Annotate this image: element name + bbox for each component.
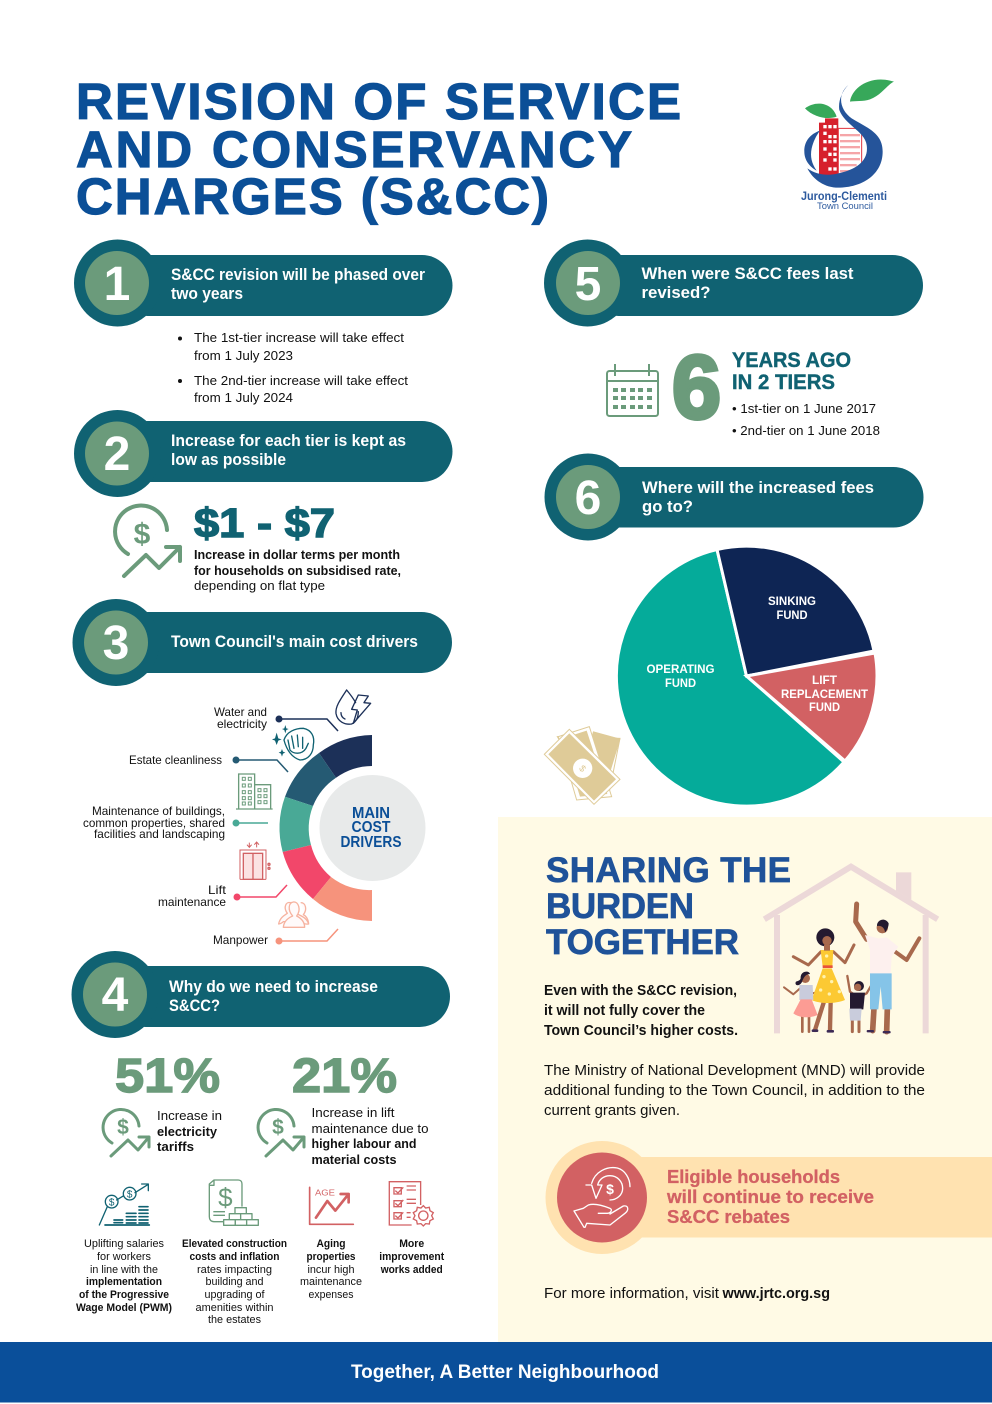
text: MND additional funding: The Ministry of National Development (MND) will provide [544,1063,925,1079]
text: even with the revision: Even with the S&CC revision, [544,983,737,999]
label: maintenance of buildings [83,804,268,841]
stat: big 6: 6 [672,338,721,438]
label: water and electricity [214,705,338,731]
text: even with the revision: it will not fully cover the [544,1003,705,1019]
text: electricity tariffs: tariffs [157,1139,194,1154]
text: construction costs [182,1238,287,1326]
section 2 description: for households on subsidised rate, [194,563,401,578]
text: electricity tariffs: electricity [157,1124,218,1139]
logo: Jurong-Clementi Town Council: Town Council [817,201,873,211]
title: CHARGES (S&CC) [76,168,549,225]
section 6 header [544,454,924,540]
text: electricity tariffs [157,1108,222,1154]
chart: fund allocation pie: OPERATING [646,662,714,676]
logo: Jurong-Clementi Town Council: Jurong-Clementi [801,191,887,203]
section 4 header [72,951,450,1038]
text: lift maintenance increase: Increase in lift [312,1105,395,1120]
text: lift maintenance increase: material costs [312,1152,396,1167]
icon: construction costs [209,1180,258,1225]
section 3 header: Town Council's main cost drivers [171,633,418,651]
section 6 header: 6 [575,472,601,525]
text: uplifting salaries [76,1238,172,1314]
section 1 header: two years [171,285,243,303]
text: uplifting salaries: Uplifting salaries [84,1238,164,1250]
section 2 description [194,547,401,593]
icon: rebate hand with dollar [574,1168,630,1227]
text: years ago in 2 tiers: • 2nd-tier on 1 June 2018 [732,423,880,438]
section 4 header: S&CC? [169,997,220,1015]
icon: calendar [607,364,658,416]
label: maintenance of buildings: Maintenance of buildings, [92,804,225,818]
text: more improvement works: works added [380,1264,443,1276]
chart: fund allocation pie: REPLACEMENT [781,687,869,701]
section 4 header: 4 [102,969,129,1022]
label: estate cleanliness [129,753,288,772]
icon: improvement checklist [389,1182,433,1226]
chart: fund allocation pie: FUND [809,700,840,714]
chart: fund allocation pie: LIFT [812,673,838,687]
label: maintenance of buildings: facilities and landscaping [94,827,225,841]
icon: lift maintenance cost rising: $ [272,1116,284,1139]
chart: fund allocation pie: SINKING [768,594,816,608]
section 2 header: low as possible [171,451,286,469]
section 3 header [72,599,452,686]
stat: 21%: 21% [292,1050,397,1103]
text: aging properties [300,1238,362,1301]
text: construction costs: building and [206,1276,264,1288]
section 5 header: When were S&CC fees last [642,265,854,283]
text: aging properties: expenses [308,1289,354,1301]
section 1 header: 1 [104,258,130,311]
label: water and electricity: electricity [217,717,267,731]
heading: sharing the burden together: TOGETHER [546,923,739,962]
chart: fund allocation pie: FUND [776,608,808,622]
heading: sharing the burden together: SHARING THE [546,851,791,890]
icon: cleaning hand [272,725,314,760]
text: more information: www.jrtc.org.sg [722,1286,830,1302]
text: uplifting salaries: of the Progressive [79,1289,169,1301]
callout: eligible households rebates: Eligible households [667,1167,840,1187]
text: more improvement works: More [399,1238,424,1250]
section 1 header [74,240,452,326]
icon: construction costs: $ [218,1183,233,1213]
section 2 header [74,410,452,497]
chart: main cost drivers half donut: COST [352,819,391,836]
section 5 header: revised? [642,284,710,302]
label: lift maintenance: Lift [208,883,227,897]
icon: electricity cost rising: $ [117,1116,129,1139]
section 5 header [544,240,923,326]
text: even with the revision [544,983,738,1039]
heading: sharing the burden together [546,851,791,962]
icon: electricity cost rising [103,1109,149,1156]
icon: rebate hand with dollar: $ [606,1181,614,1197]
text: more improvement works: improvement [379,1251,445,1263]
text: MND additional funding: additional funding to the Town Council, in addition to the [544,1083,925,1099]
title [76,73,681,225]
chart: fund allocation pie: FUND [665,676,696,690]
text: uplifting salaries: implementation [86,1276,162,1288]
section 1 bullet list [178,330,408,405]
text: even with the revision: Town Council’s higher costs. [544,1023,738,1039]
text: aging properties: incur high [308,1264,354,1276]
chart: main cost drivers half donut: MAIN [352,805,390,822]
section 2 description: depending on flat type [194,578,325,593]
text: construction costs: rates impacting [197,1264,272,1276]
label: manpower [213,929,338,947]
text: lift maintenance increase [312,1105,428,1167]
text: uplifting salaries: Wage Model (PWM) [76,1302,172,1314]
chart: main cost drivers half donut: DRIVERS [340,834,402,851]
section 1 bullet list: from 1 July 2023 [194,348,293,363]
chart: main cost drivers half donut [280,735,426,921]
section 1 header: S&CC revision will be phased over [171,266,426,284]
icon: salaries growth: $ [127,1189,133,1200]
title: REVISION OF SERVICE [76,73,681,130]
icon: people [279,902,309,927]
icon: dollar with rising arrow [115,506,180,576]
label: manpower: Manpower [213,933,268,947]
icon: salaries growth [99,1184,149,1225]
section 2 description: Increase in dollar terms per month [194,547,400,562]
icon: lift [240,842,270,879]
text: construction costs: the estates [208,1314,261,1326]
callout: eligible households rebates: S&CC rebates [667,1207,790,1227]
section 1 bullet list: from 1 July 2024 [194,390,293,405]
section 2 header: Increase for each tier is kept as [171,432,406,450]
illustration: family in house [764,867,938,1033]
text: uplifting salaries: for workers [97,1251,151,1263]
label: maintenance of buildings: common properties, shared [83,816,225,830]
text: lift maintenance increase: maintenance due to [312,1121,428,1136]
callout: eligible households rebates [546,1141,992,1254]
icon: aging chart: AGE [315,1188,335,1198]
icon: banknotes: $ [577,763,588,774]
text: aging properties: properties [306,1251,356,1263]
text: construction costs: amenities within [196,1302,274,1314]
text: construction costs: upgrading of [204,1289,265,1301]
footer banner: Together, A Better Neighbourhood [351,1362,659,1383]
label: water and electricity: Water and [214,705,267,719]
chart: fund allocation pie [616,546,877,806]
icon: aging chart [310,1187,353,1224]
logo: Jurong-Clementi Town Council [801,80,894,211]
label: lift maintenance [158,883,287,909]
text: years ago in 2 tiers: YEARS AGO [732,348,851,372]
icon: salaries growth: $ [109,1197,115,1208]
section 1 bullet list: The 1st-tier increase will take effect [194,330,404,345]
text: construction costs: costs and inflation [190,1251,280,1263]
footer banner [0,1342,992,1402]
section 6 header: go to? [642,498,693,516]
text: years ago in 2 tiers: • 1st-tier on 1 June 2017 [732,401,876,416]
panel: sharing the burden background [498,817,992,1343]
text: more information [544,1286,830,1302]
icon: dollar with rising arrow: $ [134,518,151,551]
text: MND additional funding: current grants given. [544,1103,680,1119]
stat: 51%: 51% [115,1050,220,1103]
icon: buildings [236,774,273,809]
text: years ago in 2 tiers: IN 2 TIERS [732,370,835,394]
text: aging properties: maintenance [300,1276,362,1288]
section 2 header: 2 [104,428,130,481]
text: aging properties: Aging [316,1238,346,1250]
text: electricity tariffs: Increase in [157,1108,222,1123]
callout: eligible households rebates: will continue to receive [666,1187,874,1207]
section 4 header: Why do we need to increase [169,978,378,996]
heading: sharing the burden together: BURDEN [546,887,694,926]
icon: lift maintenance cost rising [258,1109,304,1156]
text: more information: For more information, visit [544,1286,719,1302]
text: MND additional funding [544,1063,925,1119]
section 1 bullet list: The 2nd-tier increase will take effect [194,373,408,388]
section 5 header: 5 [575,258,601,311]
text: uplifting salaries: in line with the [90,1264,158,1276]
title: AND CONSERVANCY [76,121,632,178]
label: estate cleanliness: Estate cleanliness [129,753,222,767]
section 6 header: Where will the increased fees [642,479,874,497]
text: more improvement works [379,1238,445,1276]
icon: water drop and lightning [336,690,371,724]
text: lift maintenance increase: higher labour and [312,1136,417,1151]
stat: $1 - $7: $1 - $7 [194,500,335,546]
section 3 header: 3 [103,617,129,670]
icon: banknotes [544,727,620,804]
text: construction costs: Elevated construction [182,1238,287,1250]
label: lift maintenance: maintenance [158,895,226,909]
text: years ago in 2 tiers [732,348,880,438]
